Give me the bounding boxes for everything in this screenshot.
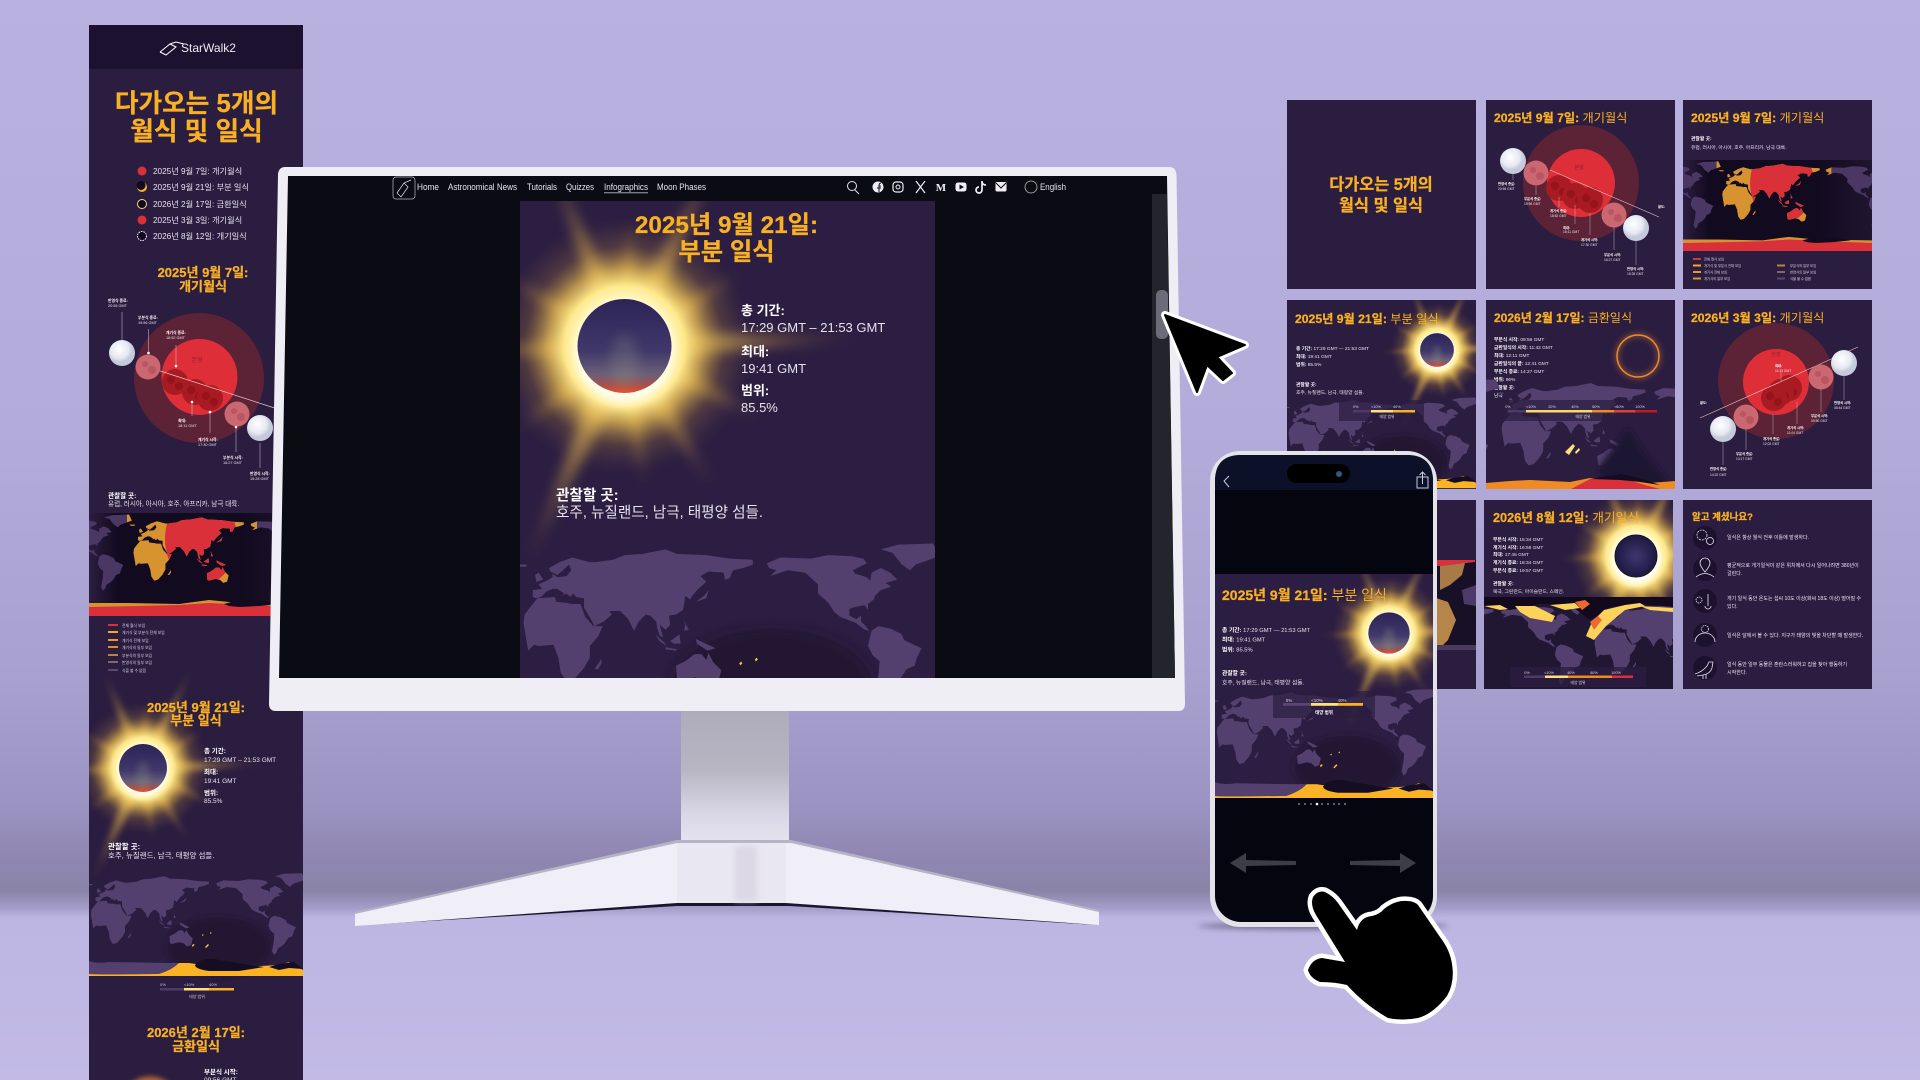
legend: visibility: 반영식의 일부 보임 <box>122 660 152 665</box>
infographic panel on screen: 관찰할 곳: <box>556 487 619 504</box>
thumbnail: 2025 Sep 21 partial eclipse <box>1287 300 1476 489</box>
eclipse details: 최대: <box>204 767 218 776</box>
slide on phone: 40% <box>1337 698 1347 703</box>
lunar eclipse diagram: 17:30 GMT <box>198 443 218 447</box>
lunar eclipse diagram: 15:28 GMT <box>250 477 270 481</box>
annular details: 부분식 시작: <box>204 1067 238 1076</box>
thumbnail: 2025 Sep 7 diagram: 본영 <box>1574 164 1584 171</box>
slide on phone: <10% <box>1311 698 1323 703</box>
navigation bar: Tutorials <box>527 182 557 192</box>
thumbnail: 2026 Mar 3 diagram: 09:50 GMT <box>1811 419 1828 423</box>
list of eclipses: 2025년 9월 21일: 부분 일식 <box>153 182 249 192</box>
heading: 2025 Sep 21 <box>147 700 245 728</box>
thumbnail: did you know: 일식 동안 일부 동물은 혼란스러워하고 집을 찾아 행동하기 <box>1727 661 1847 668</box>
navigation bar: Home <box>417 182 439 192</box>
thumbnail: 2026 Feb 17 annular eclipse: 남극 <box>1494 392 1503 399</box>
thumbnail: 2026 Aug 12 total eclipse: 40% <box>1567 671 1575 675</box>
thumbnail: 2025 Sep 7 diagram: 개기식 시작: <box>1581 237 1598 242</box>
list of eclipses: 2026년 8월 12일: 개기일식 <box>153 231 247 241</box>
scale: sun coverage: 태양 범위 <box>189 993 205 999</box>
thumbnail: 2026 Feb 17 annular eclipse: 부분식 시작: 09:56 GMT <box>1494 336 1544 343</box>
bezel <box>269 167 1185 711</box>
thumbnail: 2025 Sep 21 partial eclipse: 태양 범위 <box>1379 414 1395 419</box>
where to watch: partial: 호주, 뉴질랜드, 남극, 태평양 섬들. <box>108 850 214 860</box>
thumbnail: 2026 Aug 12 total eclipse: 북극, 그린란드, 아이슬란드, 스페인. <box>1493 588 1564 595</box>
thumbnail: 2025 Sep 7 diagram: 17:30 GMT <box>1581 243 1598 247</box>
icon: mouse cursor arrow <box>1165 315 1245 392</box>
thumbnail: 2026 Mar 3 diagram: 본영 <box>1771 351 1781 358</box>
thumbnail: 2026 Feb 17 annular eclipse: 2026년 2월 17일: 금환일식 <box>1494 310 1632 325</box>
panel: long scrolling infographic strip <box>89 25 303 1080</box>
thumbnail: 2025 Sep 7 map: 반영식의 일부 보임 <box>1790 270 1816 274</box>
thumbnail: did you know: 개기 일식 동안 온도는 섭씨 10도 이상(화씨 18도 이상) 떨어질 수 <box>1727 595 1862 602</box>
thumbnail: title card: 다가오는 5개의 <box>1329 176 1433 194</box>
thumbnail: did you know <box>1683 500 1872 689</box>
where to watch: partial: 관찰할 곳: <box>108 841 140 851</box>
thumbnail: 2025 Sep 21 partial eclipse: 0% <box>1353 405 1359 409</box>
lunar eclipse diagram: 본영 <box>191 356 203 364</box>
where to watch: lunar: 관찰할 곳: <box>108 491 136 500</box>
scale: sun coverage: <10% <box>184 982 195 987</box>
header with StarWalk2 logo <box>89 25 303 69</box>
thumbnail: 2025 Sep 7 diagram: 최대: <box>1563 225 1570 230</box>
world map: lunar eclipse visibility <box>0 513 445 616</box>
thumbnail: did you know: 걸린다. <box>1727 570 1742 577</box>
thumbnail: 2026 Feb 17 annular eclipse: 20% <box>1548 405 1556 409</box>
thumbnail: title card: 월식 및 일식 <box>1339 197 1423 215</box>
lunar eclipse diagram: 부분식 시작: <box>223 455 243 460</box>
list of eclipses: 2026년 2월 17일: 금환일식 <box>153 199 247 209</box>
thumbnail: 2026 Mar 3 diagram: 14:22 GMT <box>1710 473 1726 477</box>
infographic panel on screen: 2025년 9월 21일: <box>635 212 818 239</box>
thumbnail: 2026 Aug 12 total eclipse: 개기식 시작: 16:58 GMT <box>1493 544 1543 551</box>
scale: sun coverage <box>160 982 234 999</box>
thumbnail: 2025 Sep 7 diagram <box>1486 100 1675 289</box>
thumbnail: 2025 Sep 7 diagram: 18:52 GMT <box>1550 214 1566 218</box>
thumbnail: 2026 Mar 3 diagram: 반영식 종료: <box>1710 466 1727 471</box>
infographic panel on screen: 최대: <box>741 344 769 359</box>
thumbnail: 2025 Sep 7 map: 유럽, 러시아, 아시아, 호주, 아프리카, 남극 대륙. <box>1691 144 1786 151</box>
legend: visibility: 개기식 및 부분식 전체 보임 <box>122 630 165 635</box>
thumbnail: 2025 Sep 7 diagram: 19:56 GMT <box>1524 202 1540 206</box>
infographic panel on screen: 범위: <box>741 383 769 398</box>
thumbnail: 2025 Sep 7 diagram: 반영식 종료: <box>1498 181 1515 186</box>
heading: 2026 Feb 17: 2026년 2월 17일: <box>147 1025 245 1040</box>
thumbnail: 2026 Feb 17 annular eclipse: 최대: 12:11 GMT <box>1494 352 1529 359</box>
thumbnail: 2026 Feb 17 annular eclipse: <10% <box>1526 405 1537 409</box>
thumbnail: 2025 Sep 21 partial eclipse: <10% <box>1371 405 1381 409</box>
thumbnail: 2026 Mar 3 diagram: 08:44 GMT <box>1834 406 1850 410</box>
lunar eclipse diagram: 최대: <box>178 418 186 423</box>
thumbnail: 2026 Aug 12 total eclipse: 부분식 종료: 19:57 GMT <box>1493 567 1543 574</box>
thumbnail: 2025 Sep 7 map: 관찰할 곳: <box>1691 135 1712 142</box>
phone <box>904 451 1558 927</box>
thumbnail: 2026 Feb 17 annular eclipse: 60% <box>1592 405 1600 409</box>
icon: pointing hand <box>1308 892 1453 1020</box>
lunar eclipse diagram: 개기식 시작: <box>198 437 218 442</box>
thumbnail: 2026 Feb 17 annular eclipse: 40% <box>1571 405 1579 409</box>
thumbnail: 2025 Sep 21 partial eclipse: 2025년 9월 21일: 부분 일식 <box>1295 311 1439 326</box>
legend: visibility: 개기식의 일부 보임 <box>122 645 152 650</box>
infographic panel on screen: 17:29 GMT – 21:53 GMT <box>741 320 885 335</box>
navigation bar <box>393 177 1066 199</box>
annular details <box>204 1067 238 1080</box>
thumbnail: 2026 Aug 12 total eclipse: 최대: 17:45 GMT <box>1493 551 1529 558</box>
glow: partial solar eclipse <box>62 662 267 887</box>
thumbnail: 2025 Sep 21 partial eclipse: 총 기간: 17:29 GMT — 21:53 GMT <box>1296 345 1369 352</box>
eclipse details: 19:41 GMT <box>204 778 237 785</box>
thumbnail: 2026 Feb 17 annular eclipse: 태양 범위 <box>1575 414 1591 419</box>
thumbnail: 2025 Sep 7 diagram: 15:28 GMT <box>1627 272 1644 276</box>
infographic panel on screen: 부분 일식 <box>678 239 775 266</box>
phone shadow <box>1198 923 1448 929</box>
thumbnail: 2026 Mar 3 diagram: 2026년 3월 3일: 개기월식 <box>1691 310 1824 325</box>
navigation bar: Infographics <box>604 182 648 192</box>
infographic panel on screen: 19:41 GMT <box>741 361 806 376</box>
navigation bar: English <box>1040 182 1066 192</box>
heading: 2025 Sep 21: 2025년 9월 21일: <box>147 700 245 715</box>
thumbnail: did you know: 시작한다. <box>1727 669 1747 676</box>
dynamic island <box>1287 464 1350 483</box>
lunar eclipse diagram: 18:11 GMT <box>178 424 197 428</box>
thumbnail: 2025 Sep 7 diagram: 20:55 GMT <box>1498 187 1514 191</box>
slide on phone: 총 기간: 17:29 GMT — 21:53 GMT <box>1222 626 1311 634</box>
thumbnail: 2026 Aug 12 total eclipse: 0% <box>1524 671 1530 675</box>
monitor stand <box>355 709 1099 926</box>
infographic panel on screen: 85.5% <box>741 400 778 415</box>
slide on phone: 0% <box>1286 698 1292 703</box>
thumbnail: 2026 Aug 12 total eclipse: <10% <box>1544 671 1555 675</box>
lunar eclipse diagram: 19:56 GMT <box>138 321 158 325</box>
lunar eclipse diagram: 반영식 종료: <box>108 298 128 303</box>
thumbnail: title card <box>1287 100 1476 289</box>
thumbnail: 2026 Mar 3 diagram: 12:02 GMT <box>1763 442 1780 446</box>
lunar eclipse diagram: 부분식 종료: <box>138 315 158 320</box>
thumbnail: did you know: 알고 계셨나요? <box>1692 511 1753 523</box>
monitor <box>0 139 1185 745</box>
thumbnail: 2026 Feb 17 annular eclipse: 금환일식의 끝: 12:41 GMT <box>1494 360 1549 367</box>
main title <box>115 89 278 146</box>
main title: 월식 및 일식 <box>130 117 263 146</box>
thumbnail: 2026 Feb 17 annular eclipse <box>1486 300 1675 489</box>
header with StarWalk2 logo: StarWalk2 <box>181 41 236 55</box>
eclipse details <box>204 746 276 805</box>
lunar eclipse diagram: 16:27 GMT <box>223 461 243 465</box>
thumbnail: 2026 Aug 12 total eclipse: 80% <box>1590 671 1598 675</box>
back icon <box>1224 476 1229 487</box>
thumbnail: 2026 Mar 3 diagram: 개기식 종료: <box>1763 436 1780 441</box>
thumbnail: 2025 Sep 7 map: 개기식 전체 보임 <box>1704 270 1727 274</box>
thumbnail: did you know: 일식은 달에서 볼 수 있다. 지구가 태양의 빛을 차단할 때 발생한다. <box>1727 632 1863 639</box>
world map: partial eclipse <box>0 873 425 977</box>
nav icons <box>848 181 1037 194</box>
phone screen <box>1215 455 1433 922</box>
thumbnail: 2026 Feb 17 annular eclipse: 관찰할 곳: <box>1494 384 1515 391</box>
slide on phone: 태양 범위 <box>1315 709 1333 716</box>
thumbnail: did you know: 평균적으로 개기일식이 같은 위치에서 다시 일어나려면 380년이 <box>1727 562 1859 569</box>
thumbnail: 2026 Mar 3 diagram: 11:04 GMT <box>1787 431 1803 435</box>
slide on phone: 호주, 뉴질랜드, 남극, 태평양 섬들. <box>1222 678 1305 686</box>
thumbnail: 2025 Sep 7 diagram: 개기식 종료: <box>1550 208 1567 213</box>
thumbnail: 2026 Aug 12 total eclipse: 2026년 8월 12일: 개기일식 <box>1493 510 1639 525</box>
thumbnail: 2025 Sep 7 diagram: 2025년 9월 7일: 개기월식 <box>1494 110 1627 125</box>
thumbnail: 2026 Feb 17 annular eclipse: 부분식 종료: 14:27 GMT <box>1494 368 1544 375</box>
thumbnail: 2026 Aug 12 total eclipse <box>1484 500 1673 689</box>
legend: visibility: 식을 볼 수 없음 <box>122 668 147 673</box>
navigation bar: Quizzes <box>566 182 594 192</box>
thumbnail: 2025 Sep 7 diagram: 반영식 시작: <box>1627 266 1644 271</box>
thumbnail: 2026 Aug 12 total eclipse: 관찰할 곳: <box>1493 580 1514 587</box>
thumbnail: 2025 Sep 7 diagram: 18:11 GMT <box>1563 230 1579 234</box>
infographic panel on screen <box>520 201 935 678</box>
lunar eclipse diagram <box>108 298 290 481</box>
eclipse details: 범위: <box>204 788 218 797</box>
thumbnail: 2026 Mar 3 diagram <box>1683 300 1872 489</box>
phone frame <box>1210 451 1437 927</box>
heading: 2025 Sep 21: 부분 일식 <box>170 713 222 728</box>
status bar <box>1215 455 1433 490</box>
thumbnail: 2026 Mar 3 diagram: 부분식 시작: <box>1811 413 1828 418</box>
thumbnail: 2025 Sep 7 diagram: 부분식 종료: <box>1524 196 1541 201</box>
thumbnail: 2025 Sep 7 map: 부분식의 일부 보임 <box>1790 263 1816 268</box>
lunar eclipse diagram: 개기식 종료: <box>166 330 186 335</box>
infographic panel on screen: 총 기간: <box>741 303 785 318</box>
slide on phone: 최대: 19:41 GMT <box>1222 636 1266 644</box>
thumbnail: 2026 Feb 17 annular eclipse: 100% <box>1635 405 1645 409</box>
thumbnail: 2025 Sep 7 map: 개기식 및 부분식 전체 보임 <box>1704 263 1741 268</box>
thumbnail: 2026 Mar 3 diagram: 반영식 시작: <box>1834 400 1851 405</box>
thumbnail: did you know: 일식은 항상 월식 전후 이틀에 발생하다. <box>1727 534 1809 541</box>
slide on phone: 관찰할 곳: <box>1222 669 1247 677</box>
thumbnail: 2026 Mar 3 diagram: 13:17 GMT <box>1736 457 1752 461</box>
legend: visibility: 부분식의 일부 보임 <box>122 653 152 658</box>
pagination dots <box>1298 803 1346 805</box>
thumbnail: 2026 Mar 3 diagram: 최대: <box>1775 363 1782 368</box>
thumbnail: 2025 Sep 7 diagram: 부분식 시작: <box>1604 252 1621 257</box>
screen <box>279 176 1175 678</box>
lunar eclipse diagram: 20:55 GMT <box>108 304 128 308</box>
right arrow <box>1350 853 1416 873</box>
list of eclipses <box>136 166 249 241</box>
thumbnail: 2025 Sep 7 map: 식을 볼 수 없음 <box>1790 276 1811 281</box>
thumbnail: 2025 Sep 7 map <box>1683 100 1872 289</box>
thumbnail: 2026 Aug 12 total eclipse: 개기식 종료: 18:34 GMT <box>1493 559 1543 566</box>
heading: 2025 Sep 7: 개기월식 <box>179 279 227 294</box>
main title: 다가오는 5개의 <box>115 89 278 118</box>
left arrow <box>1230 853 1296 873</box>
thumbnail: 2026 Mar 3 diagram: 개기식 시작: <box>1787 425 1804 430</box>
eclipse details: 85.5% <box>204 798 223 805</box>
thumbnail: 2025 Sep 21 partial eclipse: 범위: 85.5% <box>1296 361 1322 368</box>
heading: 2026 Feb 17: 금환일식 <box>172 1039 220 1054</box>
where to watch: partial <box>108 841 214 860</box>
infographic panel on screen: 호주, 뉴질랜드, 남극, 태평양 섬들. <box>556 504 763 521</box>
eclipse details: 17:29 GMT – 21:53 GMT <box>204 757 276 764</box>
heading: 2025 Sep 7 <box>158 265 248 294</box>
heading: 2026 Feb 17 <box>147 1025 245 1054</box>
thumbnail: 2026 Aug 12 total eclipse: 100% <box>1611 671 1621 675</box>
thumbnail: 2025 Sep 21 partial eclipse: 호주, 뉴질랜드, 남극, 태평양 섬들. <box>1296 389 1364 396</box>
thumbnail: 2026 Aug 12 total eclipse: 부분식 시작: 15:34 GMT <box>1493 536 1543 543</box>
thumbnail: 2025 Sep 7 diagram: 16:27 GMT <box>1604 258 1620 262</box>
thumbnail: 2025 Sep 21 partial eclipse: 40% <box>1393 405 1401 409</box>
scale: sun coverage: 40% <box>209 982 217 987</box>
list of eclipses: 2025년 9월 7일: 개기월식 <box>153 166 242 176</box>
legend: visibility: 개기식 전체 보임 <box>122 638 149 643</box>
eclipse details: 총 기간: <box>204 746 226 755</box>
thumbnail: 2025 Sep 21 partial eclipse: 최대: 19:41 GMT <box>1296 353 1332 360</box>
slide on phone: 범위: 85.5% <box>1222 646 1253 654</box>
thumbnail: did you know: 있다. <box>1727 603 1738 610</box>
where to watch: lunar <box>108 491 239 508</box>
thumbnail: 2026 Feb 17 annular eclipse: 금환일식의 시작: 11:42 GMT <box>1494 344 1553 351</box>
share icon <box>1417 472 1428 488</box>
legend: visibility <box>108 623 165 673</box>
slide on phone: 2025년 9월 21일: 부분 일식 <box>1222 587 1387 603</box>
where to watch: lunar: 유럽, 러시아, 아시아, 호주, 아프리카, 남극 대륙. <box>108 499 239 508</box>
thumbnail: 2025 Sep 7 map: 개기식의 일부 보임 <box>1704 276 1730 281</box>
lunar eclipse diagram: 18:52 GMT <box>166 336 186 340</box>
scale: sun coverage: 0% <box>160 982 166 987</box>
thumbnail: 2026 Aug 12 total eclipse: 태양 범위 <box>1570 680 1586 685</box>
thumbnail: 2026 Mar 3 map (mostly hidden) <box>1437 500 1476 689</box>
thumbnail: 2026 Feb 17 annular eclipse: >80% <box>1614 405 1625 409</box>
slide on phone <box>1215 574 1433 798</box>
thumbnail: 2025 Sep 21 partial eclipse: 관찰할 곳: <box>1296 381 1317 388</box>
thumbnail: 2025 Sep 7 diagram: 황도: <box>1658 204 1665 209</box>
thumbnail: 2025 Sep 7 map: 2025년 9월 7일: 개기월식 <box>1691 110 1824 125</box>
thumbnail: 2025 Sep 7 map: 전체 월식 보임 <box>1704 256 1724 262</box>
heading: 2025 Sep 7: 2025년 9월 7일: <box>158 265 248 280</box>
nav icons: M <box>936 182 947 194</box>
legend: visibility: 전체 월식 보임 <box>122 623 145 628</box>
thumbnail: 2026 Mar 3 diagram: 11:33 GMT <box>1775 369 1791 373</box>
thumbnail: 2026 Feb 17 annular eclipse: 0% <box>1505 405 1511 409</box>
thumbnail: 2026 Feb 17 annular eclipse: 범위: 96% <box>1494 376 1516 383</box>
lunar eclipse diagram: 반영식 시작: <box>250 471 270 476</box>
navigation bar: Astronomical News <box>448 182 517 192</box>
thumbnail: 2026 Mar 3 diagram: 부분식 종료: <box>1736 451 1753 456</box>
list of eclipses: 2025년 3월 3일: 개기월식 <box>153 215 242 225</box>
navigation bar: Moon Phases <box>657 182 706 192</box>
thumbnail: 2026 Mar 3 diagram: 황도: <box>1700 400 1707 405</box>
scrollbar <box>1152 194 1175 678</box>
